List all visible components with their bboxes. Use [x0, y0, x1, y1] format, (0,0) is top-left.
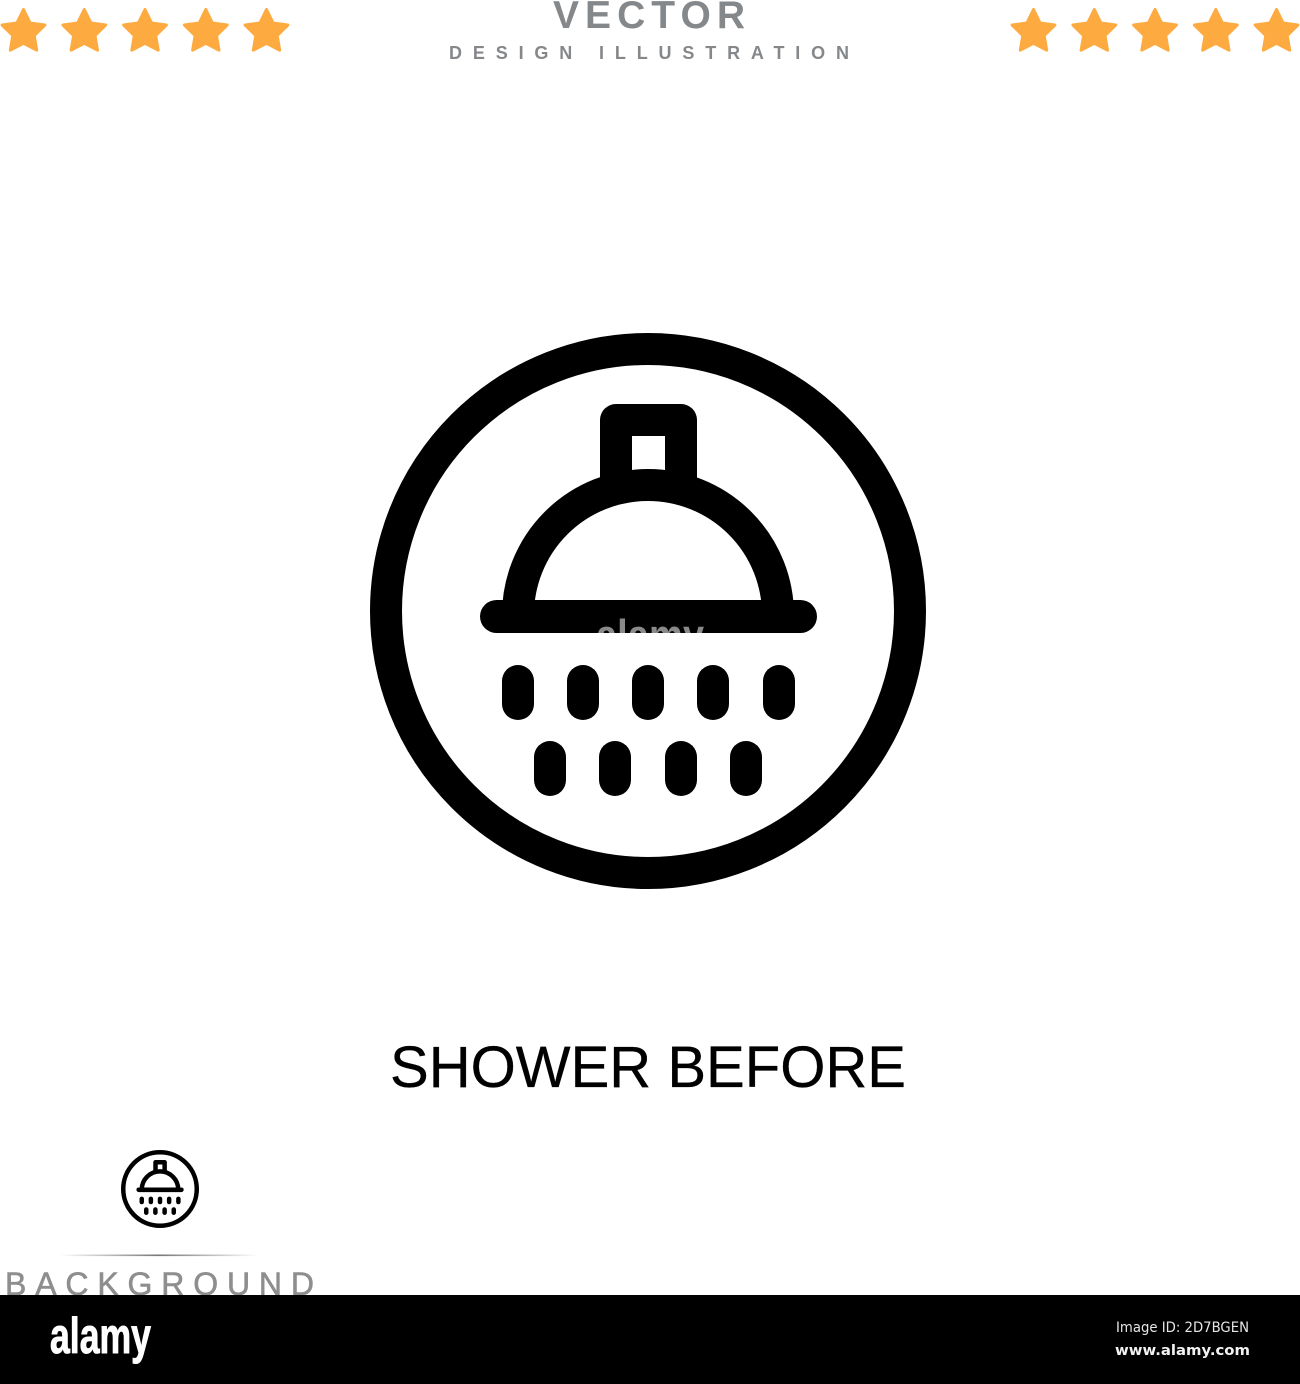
- water drops lower row: [534, 741, 762, 796]
- shower base bar: [480, 600, 817, 633]
- label: background: BACKGROUND: [5, 1266, 314, 1302]
- subheading: design illustration: DESIGN ILLUSTRATION: [449, 43, 849, 63]
- shower neck: [616, 420, 681, 490]
- icon ring: [386, 349, 910, 873]
- footer logo: alamy: alamy: [50, 1308, 151, 1364]
- left star rating: [2, 10, 288, 50]
- title: shower before: SHOWER BEFORE: [390, 1035, 906, 1100]
- website: www.alamy.com: [1115, 1343, 1250, 1359]
- small shower icon: [123, 1152, 197, 1226]
- shower dome: [518, 485, 778, 615]
- water drops upper row: [502, 665, 795, 720]
- image id: Image ID: 2D7BGEN: [1116, 1320, 1249, 1336]
- footer bar: [0, 1295, 1300, 1384]
- right star rating: [1012, 10, 1298, 50]
- watermark fragment: alamy: [596, 611, 704, 660]
- icon: shower head in circle: [386, 349, 910, 873]
